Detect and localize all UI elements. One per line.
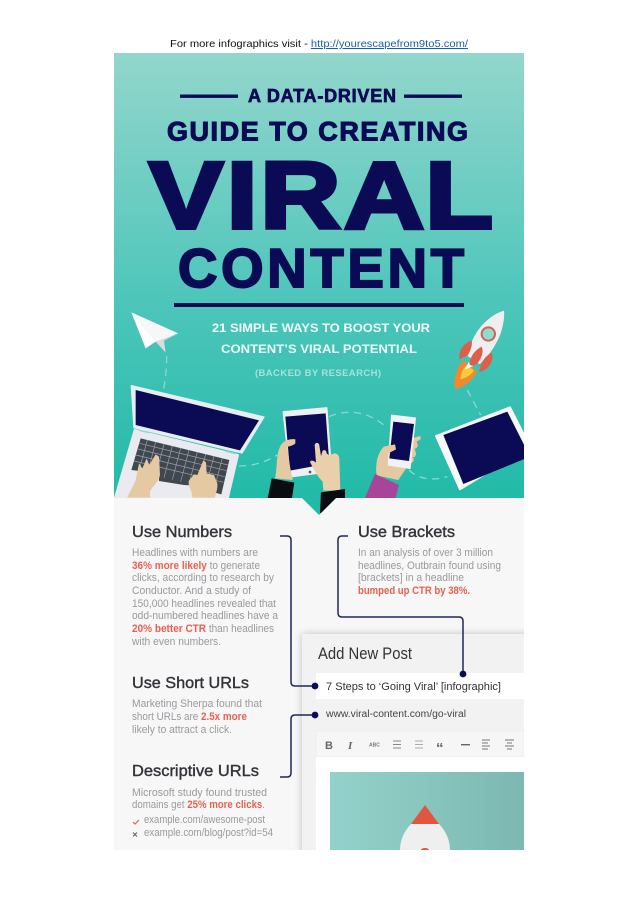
laptop base [115, 430, 238, 498]
embedded post image [330, 772, 524, 850]
title line: content: CONTENT [178, 238, 464, 299]
icon: cross mark [133, 832, 137, 836]
title underline rule [174, 303, 464, 307]
title line: a data-driven: A DATA-DRIVEN [248, 86, 396, 106]
editor content area [316, 757, 524, 850]
text block: use numbers: 150,000 headlines revealed that [132, 598, 276, 610]
url field: www.viral-content.com/go-viral [325, 709, 466, 720]
title line: a data-driven [180, 86, 462, 106]
text block: use short urls: Marketing Sherpa found that [132, 698, 262, 710]
text block: use numbers: with even numbers. [131, 636, 221, 648]
text block: use brackets: [brackets] in a headline [358, 572, 464, 584]
text block: use short urls: short URLs are 2.5x more [132, 711, 247, 723]
subtitle [212, 321, 430, 379]
dashed flight paths [163, 356, 481, 479]
right hand [189, 460, 217, 498]
editor heading: Add New Post [318, 645, 412, 663]
connector: use brackets to title field [338, 536, 466, 677]
text block: descriptive urls: domains get 25% more clicks. [132, 799, 265, 811]
text block: use numbers: 36% more likely to generate [132, 560, 260, 572]
text block: descriptive urls [132, 763, 273, 839]
header link line: For more infographics visit - http://yourescapefrom9to5.com/ [170, 38, 468, 50]
icon: check mark [133, 820, 139, 824]
icon: laptop [115, 386, 264, 498]
infographic artwork [114, 53, 542, 864]
text block: use brackets: In an analysis of over 3 million [358, 547, 493, 559]
subtitle: (BACKED BY RESEARCH) [255, 368, 381, 379]
title input [316, 673, 524, 699]
text block: use brackets: bumped up CTR by 38%. [358, 585, 470, 597]
title line: guide to creating: GUIDE TO CREATING [167, 116, 468, 146]
text block: use numbers: 20% better CTR than headlines [132, 623, 274, 635]
panel: teal hero background with notch [114, 53, 524, 515]
text block: use brackets [358, 524, 501, 597]
keyboard [131, 438, 229, 494]
text block: use brackets: headlines, Outbrain found using [358, 560, 501, 572]
text block: use short urls: Use Short URLs [132, 675, 249, 692]
text block: use numbers: Headlines with numbers are [132, 547, 258, 559]
icon: rocket [454, 311, 504, 389]
text block: descriptive urls: Descriptive URLs [132, 763, 259, 780]
hero illustration group [115, 311, 530, 513]
title block [149, 86, 493, 299]
subtitle: 21 SIMPLE WAYS TO BOOST YOUR [212, 321, 430, 335]
text block: use short urls: likely to attract a click. [132, 724, 232, 736]
left hand [127, 454, 160, 498]
editor toolbar: I [347, 740, 353, 752]
text block: use numbers: odd-numbered headlines have a [132, 610, 278, 622]
title line: viral: VIRAL [149, 142, 493, 248]
panel: editor mockup [302, 634, 542, 864]
text block: use short urls [132, 675, 262, 736]
icon: phone held in hand [364, 415, 421, 500]
text block: use numbers: Use Numbers [132, 524, 232, 541]
icon: tablet right [436, 407, 530, 489]
text block: descriptive urls: Microsoft study found trusted [132, 787, 267, 799]
text block: use brackets: Use Brackets [358, 524, 455, 541]
editor toolbar: ABC [369, 742, 380, 748]
text block: descriptive urls: example.com/blog/post?id=54 [144, 827, 273, 839]
editor toolbar: B [325, 740, 333, 752]
title input: 7 Steps to ‘Going Viral’ [infographic] [326, 681, 501, 693]
connector: use numbers to title field [280, 536, 318, 689]
editor toolbar [326, 740, 514, 750]
text block: use numbers: Conductor. And a study of [132, 585, 251, 597]
text block: descriptive urls: example.com/awesome-post [144, 814, 265, 826]
text block: use numbers [131, 524, 278, 648]
icon: tablet held by two hands [267, 408, 345, 513]
laptop lid [131, 386, 264, 453]
panel: white content section [114, 498, 524, 850]
editor toolbar: “ [436, 740, 444, 757]
icon: post image rocket [400, 805, 450, 852]
text block: use numbers: clicks, according to research by [132, 572, 275, 584]
connector: descriptive urls to url field [280, 712, 318, 777]
subtitle: CONTENT’S VIRAL POTENTIAL [221, 342, 417, 356]
icon: paper plane [131, 312, 178, 353]
